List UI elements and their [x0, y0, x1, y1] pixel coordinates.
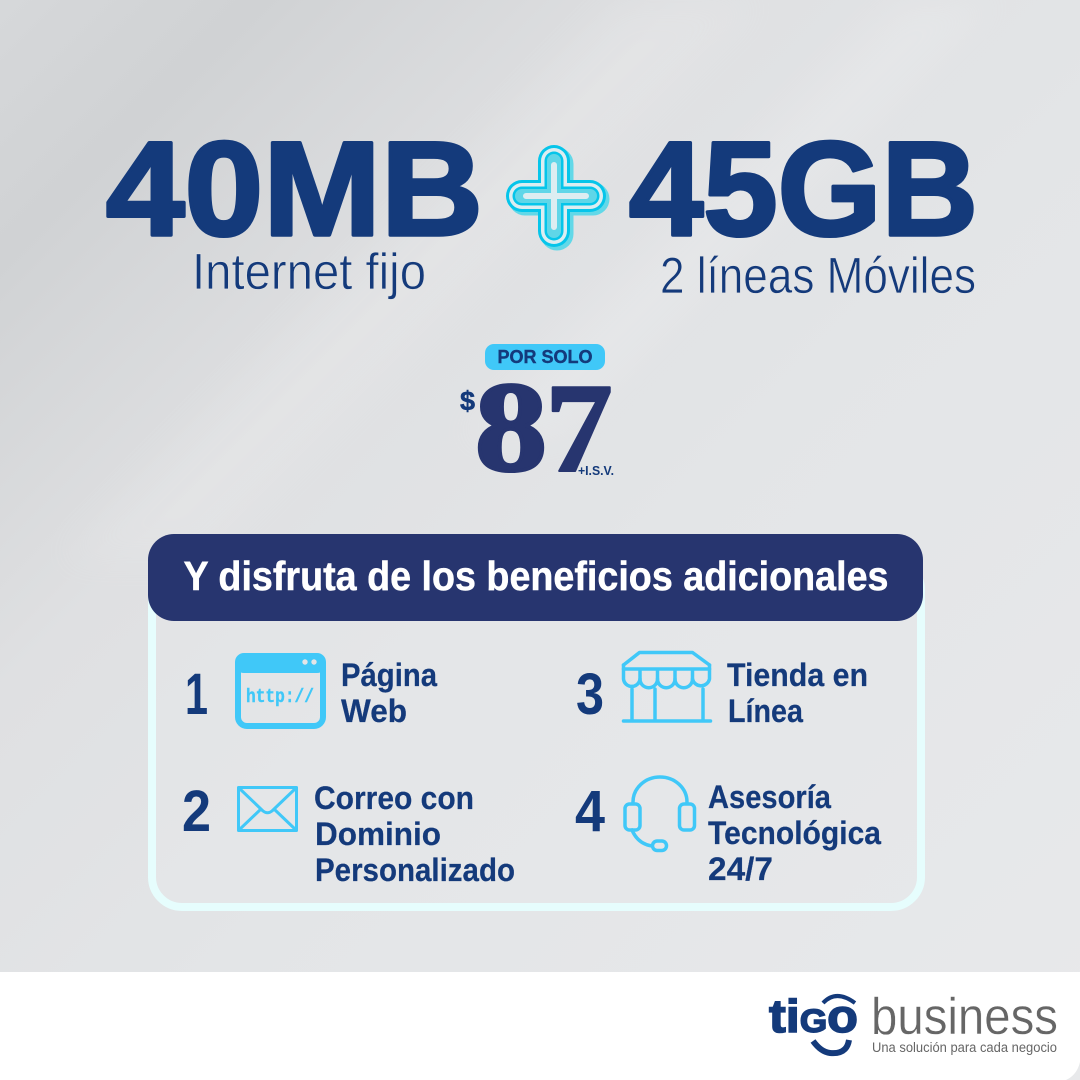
- panel heading: Y disfruta de los beneficios adicionales: [184, 553, 888, 599]
- benefit 2: correo: [182, 779, 515, 888]
- subheading: 2 líneas Móviles: 2 líneas Móviles: [660, 247, 976, 304]
- benefit 4: asesoría: 24/7: [708, 851, 773, 887]
- price: $87 +I.S.V.: +I.S.V.: [578, 464, 614, 478]
- benefit 3: tienda: 3: [576, 662, 604, 727]
- subheading: Internet fijo: Internet fijo: [192, 243, 426, 300]
- badge: por solo: POR SOLO: [498, 347, 592, 367]
- logo: tigo business: Una solución para cada negocio: [872, 1040, 1057, 1055]
- logo: tigo business: business: [871, 988, 1058, 1046]
- benefit 3: tienda: [576, 652, 868, 729]
- headline: 40MB: 40MB: [106, 115, 483, 264]
- price: $87 +I.S.V.: 7: [545, 357, 613, 499]
- logo: tigo business: [769, 988, 1058, 1055]
- benefit 1: página web: 1: [185, 662, 208, 727]
- benefit 4: asesoría: 4: [575, 779, 605, 844]
- icon: store: [624, 652, 710, 721]
- benefit 2: correo: Dominio: [315, 816, 441, 852]
- logo: tigo: tigo: [769, 990, 858, 1042]
- panel heading: [148, 534, 923, 621]
- benefit 4: asesoría: [575, 777, 881, 887]
- footer band: [0, 972, 1080, 1080]
- benefit 2: correo: 2: [182, 779, 211, 844]
- icon: envelope: [238, 788, 296, 830]
- benefit 2: correo: Correo con: [314, 780, 474, 816]
- price: $87 +I.S.V.: [460, 356, 614, 499]
- icon: neon plus: [522, 161, 593, 234]
- benefit 4: asesoría: Tecnológica: [708, 815, 881, 851]
- benefit 2: correo: Personalizado: [315, 852, 515, 888]
- benefit 3: tienda: Tienda en: [727, 657, 868, 693]
- benefit 3: tienda: Línea: [728, 693, 803, 729]
- benefit 1: página web: [185, 656, 437, 729]
- headline: 45GB: 45GB: [629, 115, 978, 264]
- benefit 1: página web: Web: [341, 693, 407, 729]
- badge: por solo: [485, 344, 605, 370]
- icon: browser: http://: [246, 686, 314, 708]
- price: $87 +I.S.V.: $: [460, 386, 475, 416]
- price: $87 +I.S.V.: 8: [475, 356, 547, 498]
- benefit 1: página web: Página: [341, 657, 437, 693]
- icon: browser: [238, 656, 323, 726]
- panel: benefits: [148, 534, 923, 907]
- icon: headset: [625, 777, 694, 850]
- benefit 4: asesoría: Asesoría: [708, 779, 831, 815]
